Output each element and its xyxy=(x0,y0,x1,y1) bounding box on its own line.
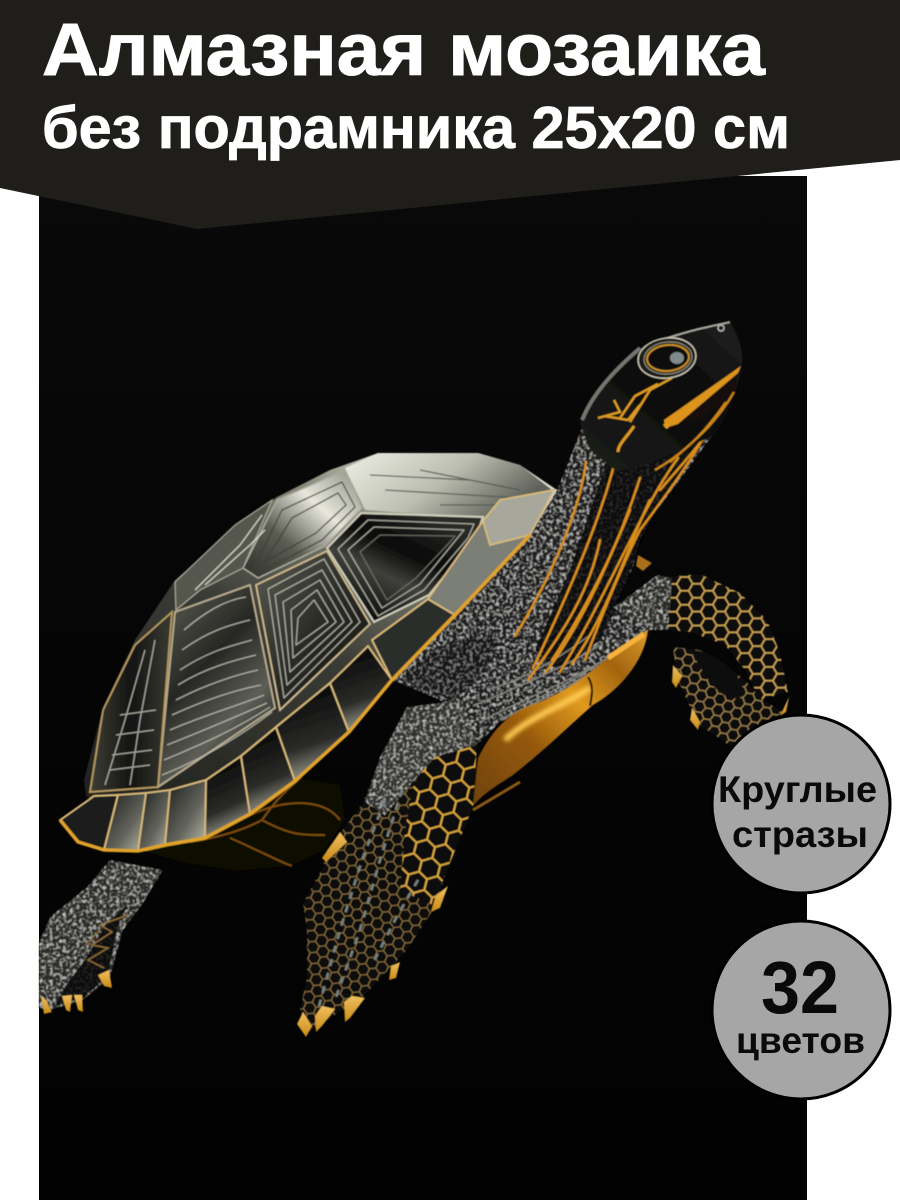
golden rim edge xyxy=(60,535,530,851)
neck and body skin xyxy=(392,395,735,750)
scute far left xyxy=(90,612,172,792)
scute upper-left xyxy=(175,500,272,610)
badge: round rhinestones: стразы xyxy=(732,814,868,855)
badge: round rhinestones: Круглые xyxy=(718,769,877,810)
badge: 32 colours: 32 xyxy=(761,946,839,1029)
top scute highlight xyxy=(345,453,552,518)
scute right xyxy=(327,513,483,622)
shell xyxy=(60,453,557,851)
eye xyxy=(635,334,699,382)
front leg with claws xyxy=(297,700,477,1037)
head xyxy=(580,322,742,470)
illustration: turtle xyxy=(39,322,789,1037)
shell dome xyxy=(84,453,557,815)
title: Алмазная мозаика xyxy=(42,8,766,91)
honeycomb scales xyxy=(400,745,477,905)
subtitle: без подрамника 25х20 см xyxy=(42,95,790,161)
badge: 32 colours xyxy=(712,921,890,1099)
badge: round rhinestones xyxy=(712,715,890,893)
scute left large xyxy=(158,585,275,787)
plastron gold xyxy=(473,630,648,810)
scute upper xyxy=(243,470,362,578)
plastron underside below shell xyxy=(140,778,345,871)
shell rim plates xyxy=(60,490,554,851)
right flipper xyxy=(613,555,789,748)
scute centre xyxy=(256,551,370,710)
header banner xyxy=(0,0,900,229)
hind leg with claws xyxy=(39,860,163,1014)
neck stripes xyxy=(515,385,735,680)
growth ridges xyxy=(105,470,530,785)
badge: 32 colours: цветов xyxy=(736,1020,865,1061)
photo panel: black background xyxy=(39,176,807,1200)
